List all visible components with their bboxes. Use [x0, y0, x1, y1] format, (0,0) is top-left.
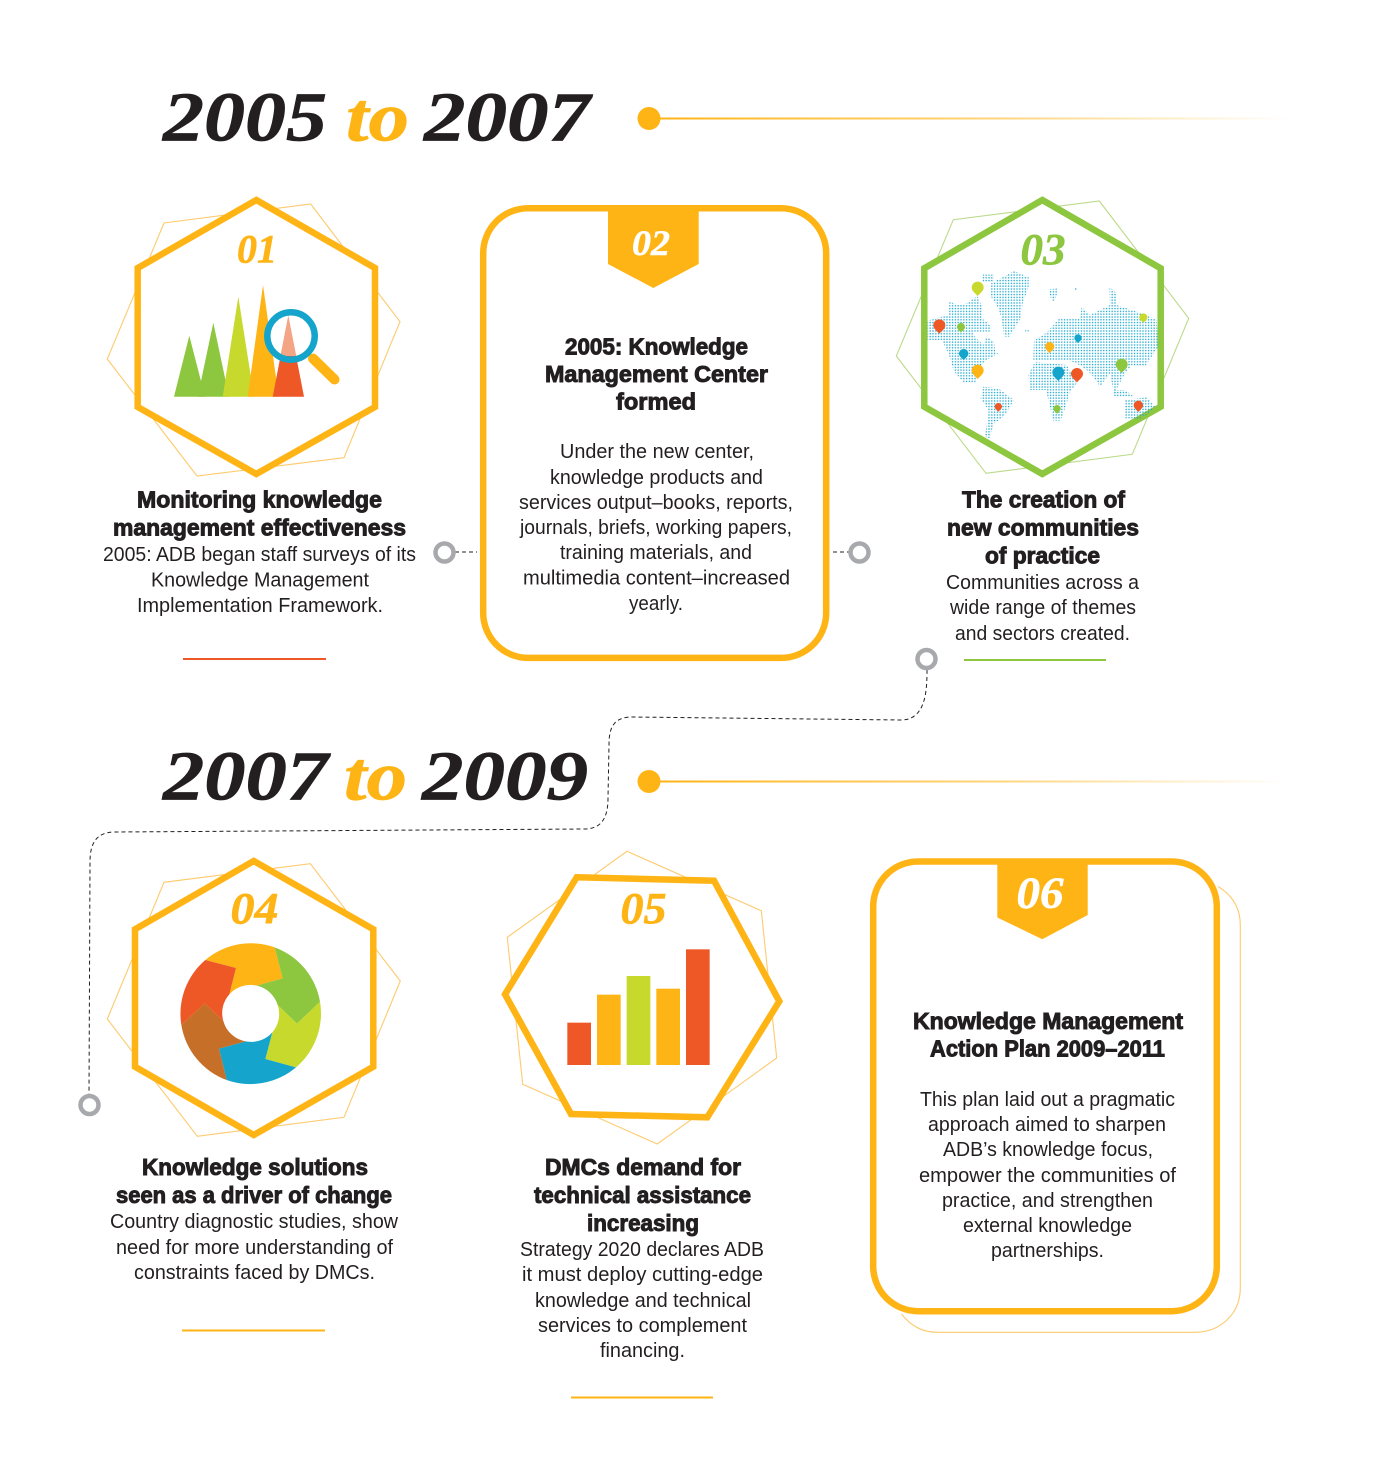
text block: DMCs demand [520, 1154, 764, 1362]
connector ring right [850, 544, 868, 562]
connector: dashed path between sections [89, 552, 927, 1095]
number 01: 01 [237, 226, 277, 272]
body 02: yearly. [629, 593, 683, 615]
text block: DMCs demand: it must deploy cutting-edge [522, 1264, 763, 1286]
text block: DMCs demand: Strategy 2020 declares ADB [520, 1239, 764, 1261]
heading 02: formed [616, 388, 696, 414]
text block: monitoring knowledge [103, 486, 416, 617]
text block: knowledge solutions: need for more understanding of [116, 1237, 393, 1259]
text block: monitoring knowledge: Implementation Framework. [137, 595, 383, 617]
text block: communities of practice: and sectors created. [955, 623, 1130, 645]
text block: monitoring knowledge: Monitoring knowledge [137, 486, 382, 512]
text block: knowledge solutions [110, 1154, 399, 1284]
text block: communities of practice: new communities [947, 514, 1139, 540]
divider 1 [183, 658, 326, 660]
badge 02 [608, 208, 699, 288]
body 02: journals, briefs, working papers, [519, 517, 792, 539]
connector ring left [436, 544, 454, 562]
text block: DMCs demand: services to complement [538, 1315, 747, 1337]
text block: communities of practice: of practice [985, 542, 1100, 568]
icon: dotted world map with pins [928, 271, 1158, 438]
connector ring bottom [80, 1096, 98, 1114]
panel: 05 DMCs demand hexagon [505, 851, 779, 1144]
body 06: ADB’s knowledge focus, [943, 1139, 1153, 1161]
text block: communities of practice: The creation of [962, 486, 1125, 512]
title: 2007 to 2009: to [344, 738, 407, 816]
divider 5 [571, 1396, 713, 1398]
body 06: external knowledge [963, 1215, 1132, 1237]
body 06 [919, 1089, 1176, 1262]
text block: DMCs demand: increasing [587, 1210, 699, 1236]
heading 06: Action Plan 2009–2011 [930, 1036, 1165, 1062]
panel: 02 knowledge management center card [483, 208, 826, 658]
heading 06 [913, 1008, 1183, 1062]
text block: monitoring knowledge: 2005: ADB began staff surveys of its [103, 544, 416, 566]
title: 2007 to 2009 [162, 738, 588, 816]
badge 02: 02 [632, 223, 670, 263]
text block: monitoring knowledge: management effectiveness [113, 514, 406, 540]
text block: knowledge solutions: Country diagnostic studies, show [110, 1211, 399, 1233]
body 06: practice, and strengthen [942, 1190, 1153, 1212]
heading 02 [545, 334, 768, 414]
panel: 03 communities hexagon [896, 200, 1189, 474]
heading 02: 2005: Knowledge [565, 334, 748, 360]
number 04: 04 [230, 884, 278, 933]
text block: DMCs demand: financing. [600, 1340, 685, 1362]
text block: DMCs demand: technical assistance [534, 1182, 751, 1208]
text block: communities of practice: Communities across a [946, 572, 1140, 594]
connector ring top [918, 650, 936, 668]
icon: bar chart [567, 949, 710, 1065]
title: 2007 to 2009: 2007 [162, 738, 332, 816]
icon: circular arrows [180, 943, 321, 1084]
text block: communities of practice: wide range of themes [949, 597, 1136, 619]
text block: knowledge solutions: Knowledge solutions [142, 1154, 368, 1180]
body 02: services output–books, reports, [519, 492, 793, 514]
panel: 06 action plan card [873, 862, 1240, 1332]
divider 3 [964, 659, 1106, 661]
body 02: Under the new center, [560, 441, 754, 463]
body 02: multimedia content–increased [523, 568, 790, 590]
timeline marker 1 [638, 107, 1290, 130]
title: 2007 to 2009: 2009 [421, 738, 588, 816]
number 03: 03 [1020, 225, 1066, 274]
body 02 [519, 441, 793, 615]
text block: knowledge solutions: seen as a driver of change [116, 1182, 392, 1208]
text block: DMCs demand: knowledge and technical [535, 1290, 751, 1312]
body 02: knowledge products and [550, 467, 763, 489]
text block: monitoring knowledge: Knowledge Management [151, 570, 369, 592]
panel: 01 monitoring hexagon [107, 200, 400, 476]
heading 06: Knowledge Management [913, 1008, 1183, 1034]
body 06: This plan laid out a pragmatic [920, 1089, 1175, 1111]
body 06: partnerships. [991, 1240, 1104, 1262]
title: 2005 to 2007: to [346, 80, 409, 156]
heading 02: Management Center [545, 361, 768, 387]
panel: 04 knowledge solutions hexagon [107, 861, 400, 1136]
divider 4 [182, 1330, 325, 1332]
title: 2005 to 2007: 2005 [162, 80, 327, 156]
title: 2005 to 2007 [162, 80, 594, 156]
title: 2005 to 2007: 2007 [423, 80, 594, 156]
body 02: training materials, and [560, 542, 752, 564]
text block: knowledge solutions: constraints faced by DMCs. [134, 1262, 375, 1284]
badge 06: 06 [1016, 868, 1064, 918]
badge 06 [997, 864, 1088, 939]
text block: communities of practice [946, 486, 1140, 645]
icon: mountain chart with magnifier [174, 285, 334, 397]
timeline marker 2 [638, 770, 1290, 793]
text block: DMCs demand: DMCs demand for [545, 1154, 741, 1180]
body 06: approach aimed to sharpen [928, 1114, 1166, 1136]
number 05: 05 [620, 884, 666, 933]
body 06: empower the communities of [919, 1165, 1176, 1187]
